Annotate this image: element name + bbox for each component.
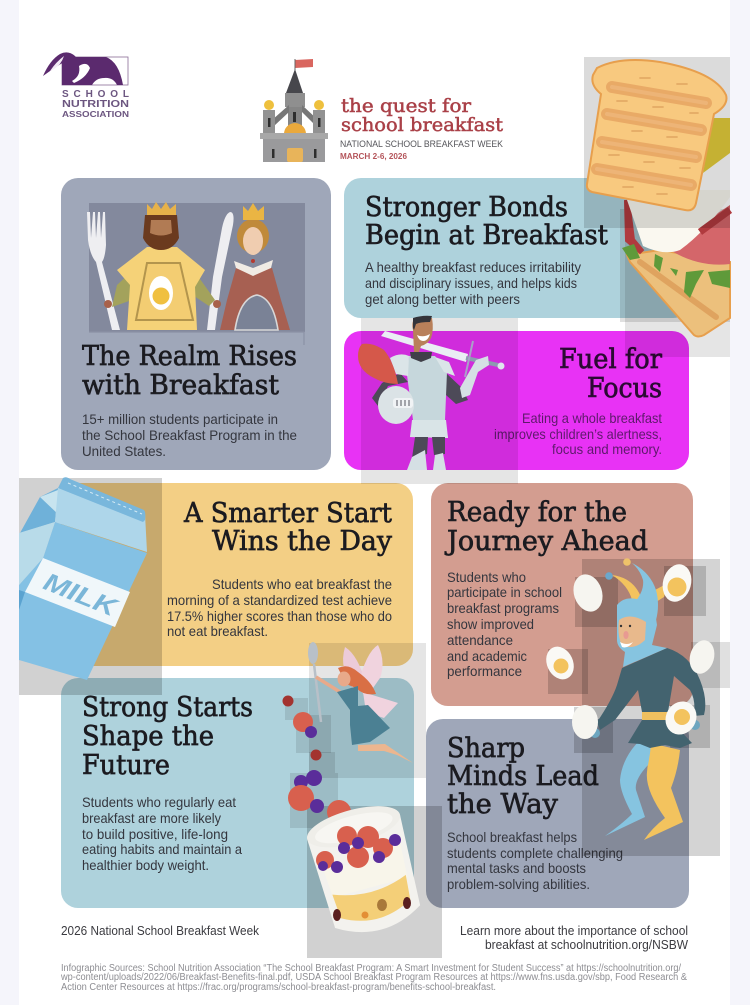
heading: Fuel for xyxy=(559,343,663,375)
footer: sources: Infographic Sources: School Nutrition Association “The School Breakfast Program: A Smart Investment for Student Success” at https://schoolnutrition.org/ xyxy=(61,963,681,974)
heading: A Smarter Start xyxy=(183,497,392,529)
heading: the Way xyxy=(447,788,558,820)
logo: School Nutrition Association: ASSOCIATION xyxy=(62,109,129,119)
body text xyxy=(447,830,623,892)
jester torso xyxy=(590,648,705,748)
heading xyxy=(82,340,297,401)
body text: focus and memory. xyxy=(552,442,662,457)
heading: with Breakfast xyxy=(82,369,279,401)
body text: morning of a standardized test achieve xyxy=(167,593,392,608)
body text: problem-solving abilities. xyxy=(447,877,590,892)
body text xyxy=(494,411,662,457)
body text: mental tasks and boosts xyxy=(447,861,586,876)
heading: Wins the Day xyxy=(212,525,392,557)
illustration: knight xyxy=(358,316,504,470)
jester hat xyxy=(605,558,668,620)
heading xyxy=(183,497,392,557)
body text: United States. xyxy=(82,444,166,459)
heading: Stronger Bonds xyxy=(365,191,568,223)
heading: Strong Starts xyxy=(82,691,253,723)
title: The Quest for School Breakfast: the quest for xyxy=(341,95,472,117)
icon: fork xyxy=(87,212,120,330)
body text: healthier body weight. xyxy=(82,858,209,873)
panel: The Realm Rises with Breakfast xyxy=(61,178,331,470)
body text xyxy=(365,260,581,307)
body text: attendance xyxy=(447,633,513,648)
body text: students complete challenging xyxy=(447,846,623,861)
heading: Journey Ahead xyxy=(444,525,648,557)
footer: sources: wp-content/uploads/2022/06/Breakfast-Benefits-final.pdf, USDA School Breakfast Program Resources at https://www.fns.usda.gov/sbp, Food Research & xyxy=(60,972,687,983)
queen xyxy=(220,203,290,330)
body text xyxy=(167,577,392,639)
heading: Focus xyxy=(587,372,662,404)
heading: Future xyxy=(82,749,170,781)
body text: and disciplinary issues, and helps kids xyxy=(365,276,577,291)
illustration: sandwich xyxy=(622,118,730,336)
body text: Students who eat breakfast the xyxy=(212,577,392,592)
illustration: fairy xyxy=(308,642,413,763)
body text: Eating a whole breakfast xyxy=(522,411,662,426)
body text: 17.5% higher scores than those who do xyxy=(167,609,392,624)
heading: Sharp xyxy=(447,732,525,764)
body text: show improved xyxy=(447,617,534,632)
heading xyxy=(559,343,663,404)
title: The Quest for School Breakfast: NATIONAL SCHOOL BREAKFAST WEEK xyxy=(340,139,504,150)
body text: School breakfast helps xyxy=(447,830,577,845)
heading xyxy=(365,191,608,251)
body text: performance xyxy=(447,664,522,679)
body text: get along better with peers xyxy=(365,292,520,307)
heading: Begin at Breakfast xyxy=(365,219,608,251)
footer: learn more: Learn more about the importance of school xyxy=(460,923,688,938)
heading xyxy=(444,496,648,557)
panel: Strong Starts Shape the Future xyxy=(61,678,414,908)
illustration: falling berries xyxy=(282,696,351,824)
heading: Shape the xyxy=(82,720,214,752)
title: The Quest for School Breakfast: school breakfast xyxy=(341,114,503,136)
heading: Ready for the xyxy=(447,496,627,528)
heading: The Realm Rises xyxy=(82,340,297,372)
footer: event note: 2026 National School Breakfast Week xyxy=(61,923,260,938)
body text: breakfast programs xyxy=(447,601,559,616)
body text xyxy=(82,795,242,873)
eggs xyxy=(541,561,718,740)
body text: Students who xyxy=(447,570,526,585)
panel: A Smarter Start Wins the Day xyxy=(61,483,413,666)
illustration: yogurt parfait xyxy=(303,798,427,942)
body text: A healthy breakfast reduces irritability xyxy=(365,260,581,275)
body text xyxy=(447,570,562,679)
icon: knife xyxy=(207,212,234,330)
logo: School Nutrition Association xyxy=(43,52,129,119)
body text: the School Breakfast Program in the xyxy=(82,428,297,443)
body text: Students who regularly eat xyxy=(82,795,236,810)
illustration: juggling jester xyxy=(541,558,718,840)
panel: Ready for the Journey Ahead xyxy=(431,483,693,706)
heading: Minds Lead xyxy=(447,760,599,792)
body text: participate in school xyxy=(447,585,562,600)
milk label: MILK xyxy=(40,568,123,623)
footer: sources xyxy=(60,963,687,993)
body text: breakfast are more likely xyxy=(82,811,221,826)
heading xyxy=(447,732,599,820)
title: The Quest for School Breakfast xyxy=(340,95,504,161)
icon: castle xyxy=(260,59,328,162)
footer: sources: Action Center Resources at https://frac.org/programs/school-breakfast-program/benefits-school-breakfast. xyxy=(61,982,496,993)
body text xyxy=(82,412,297,459)
footer: learn more: breakfast at schoolnutrition.org/NSBW xyxy=(485,937,689,952)
panel: Fuel for Focus xyxy=(344,331,689,470)
jester legs xyxy=(605,740,683,840)
jester head xyxy=(617,598,667,667)
king xyxy=(104,202,221,330)
body text: eating habits and maintain a xyxy=(82,842,242,857)
body text: and academic xyxy=(447,649,527,664)
logo: School Nutrition Association: SCHOOL xyxy=(62,89,129,100)
body text: improves children’s alertness, xyxy=(494,427,662,442)
footer: learn more xyxy=(460,923,689,952)
logo: School Nutrition Association: NUTRITION xyxy=(62,99,129,110)
body text: 15+ million students participate in xyxy=(82,412,278,427)
illustration: toast xyxy=(587,60,726,210)
illustration: milk carton xyxy=(19,477,147,680)
panel: Sharp Minds Lead the Way xyxy=(426,719,689,908)
body text: not eat breakfast. xyxy=(167,624,268,639)
illustration: king and queen xyxy=(87,202,290,330)
heading xyxy=(82,691,253,781)
panel: Stronger Bonds Begin at Breakfast xyxy=(344,178,690,318)
body text: to build positive, life-long xyxy=(82,827,228,842)
title: The Quest for School Breakfast: MARCH 2-6, 2026 xyxy=(340,152,408,161)
